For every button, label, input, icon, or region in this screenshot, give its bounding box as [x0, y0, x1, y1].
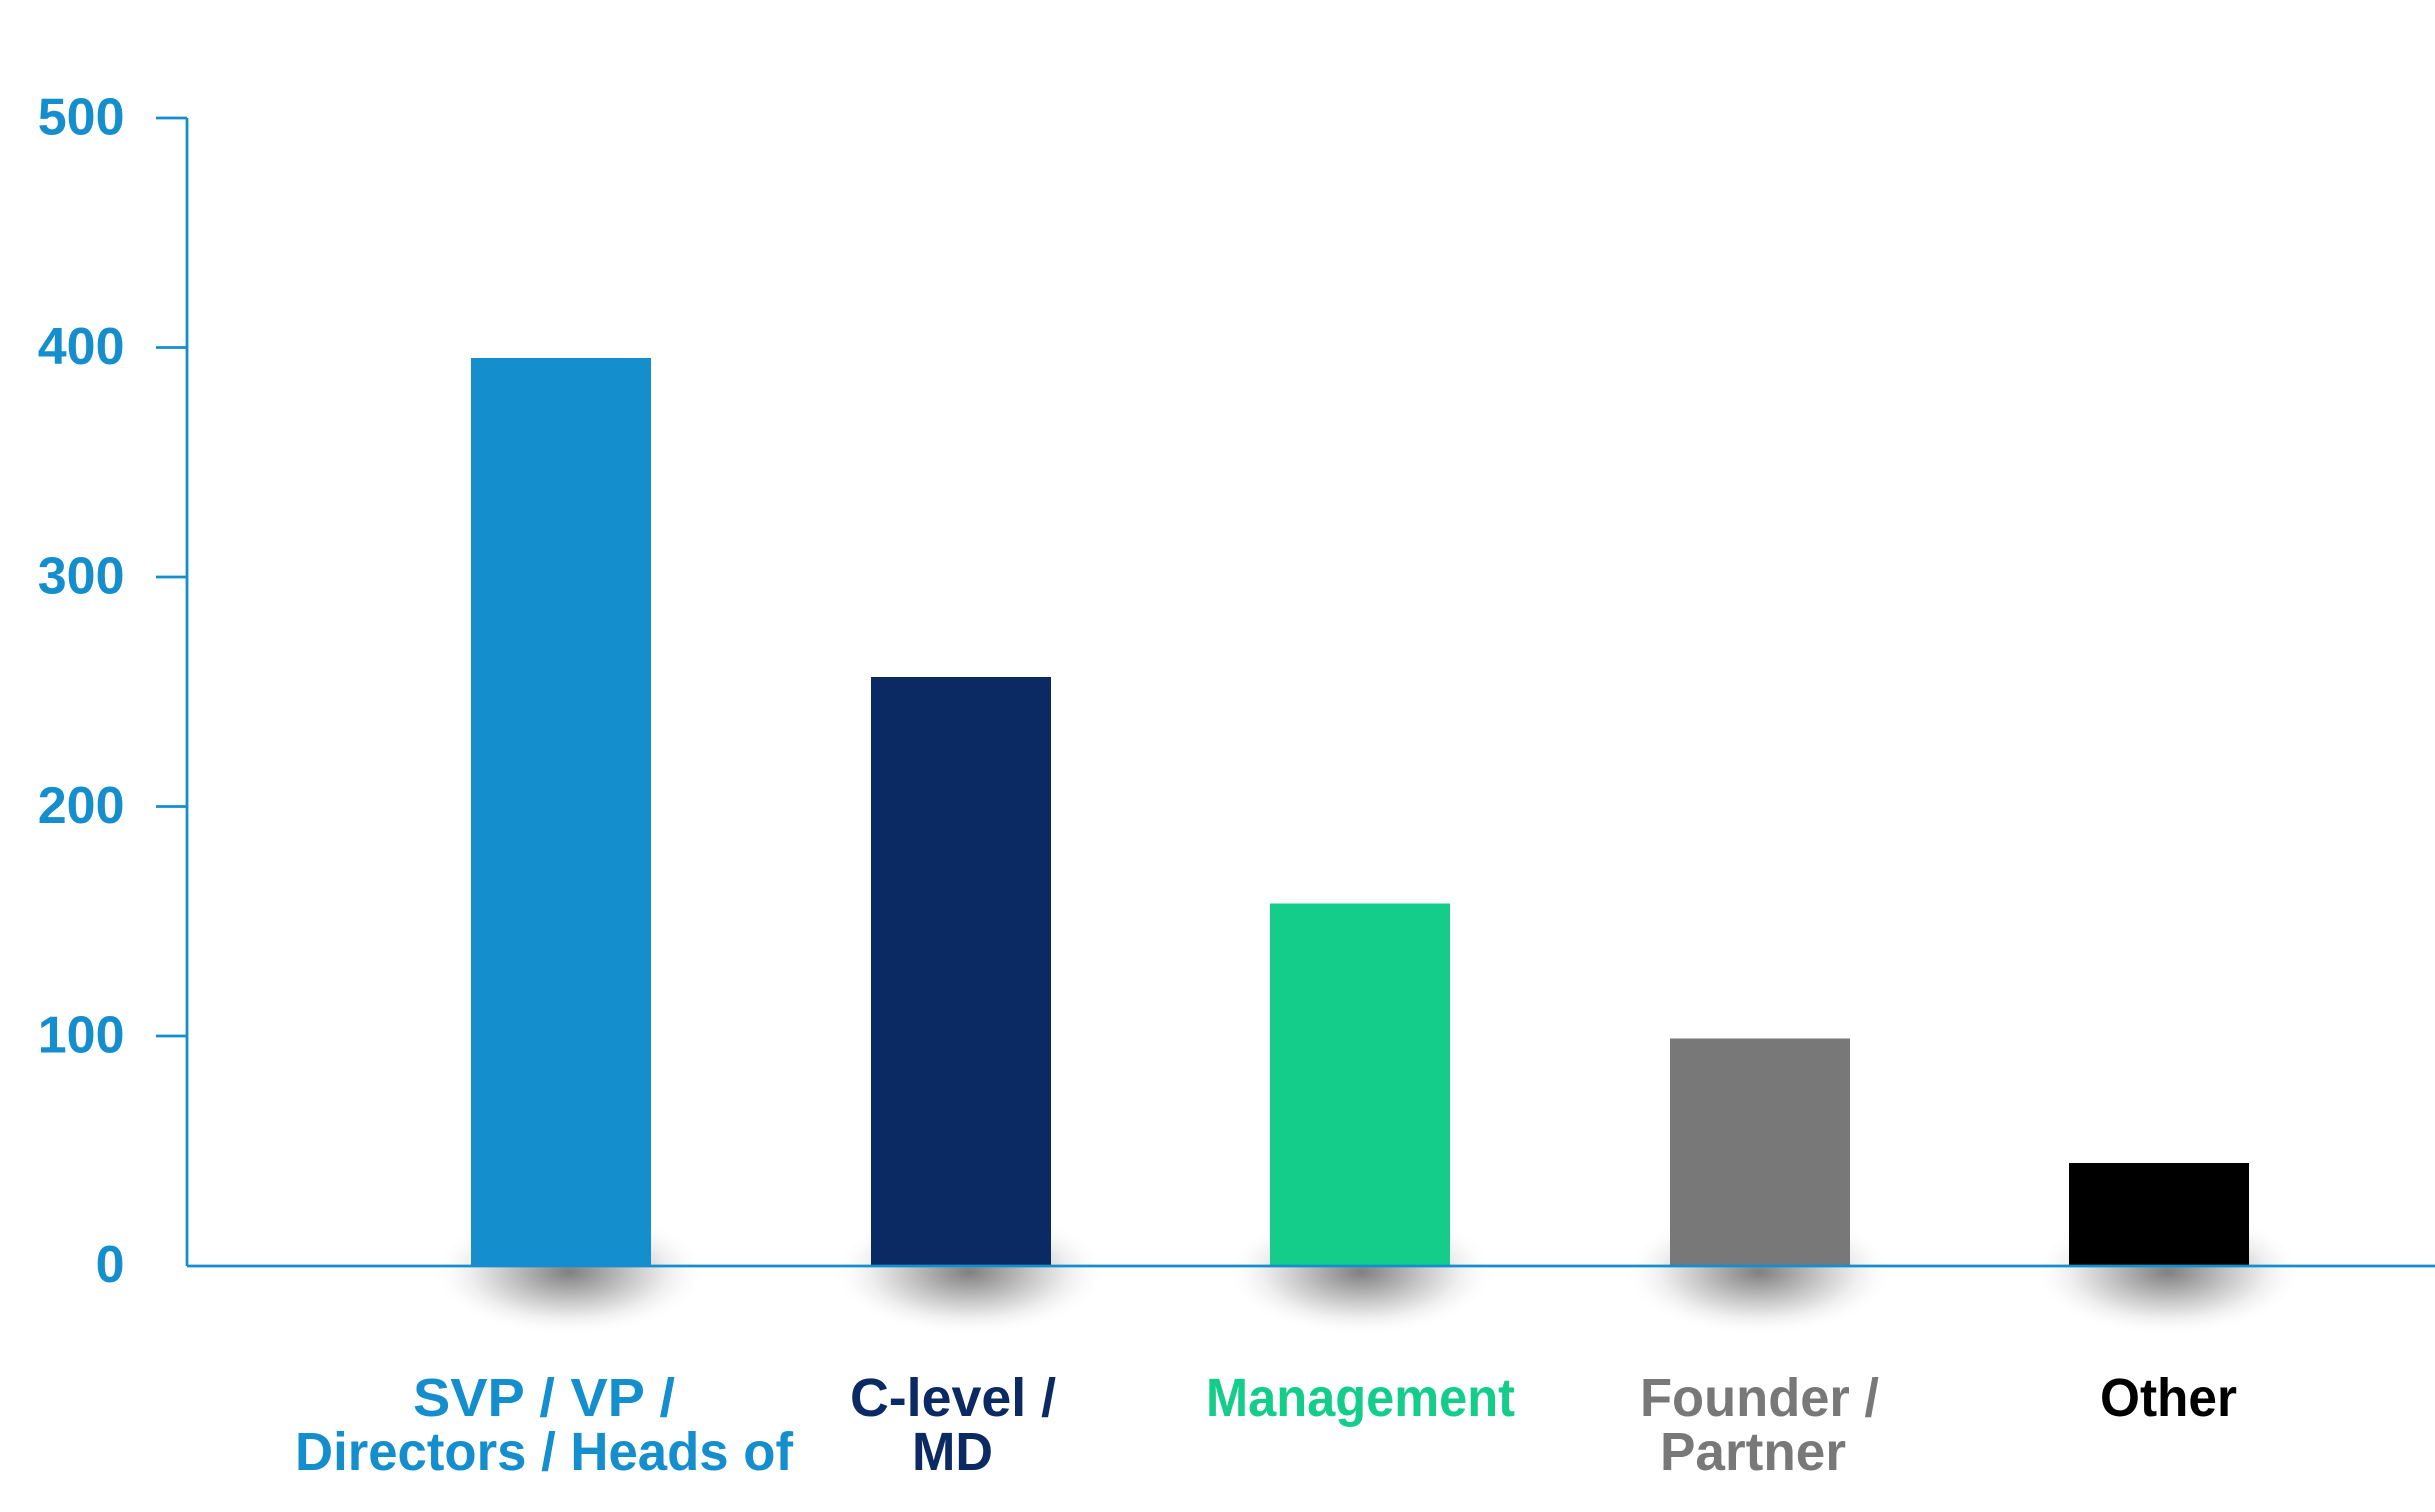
label: Founder / Partner: Partner [1660, 1422, 1846, 1482]
label: SVP / VP / Directors / Heads of [295, 1368, 794, 1482]
bar: Other [2069, 1163, 2249, 1267]
y axis labels: 100 [38, 1006, 124, 1064]
y axis labels [38, 88, 124, 1294]
label: C-level / MD: MD [912, 1422, 993, 1482]
label: SVP / VP / Directors / Heads of: SVP / VP / [413, 1368, 675, 1428]
y axis with ticks [156, 118, 187, 1266]
y axis labels: 200 [38, 777, 124, 835]
label: Other: Other [2100, 1368, 2237, 1428]
label: C-level / MD [850, 1368, 1056, 1482]
label: Founder / Partner: Founder / [1640, 1368, 1879, 1428]
bar: Management [1270, 904, 1450, 1267]
bar shadows [435, 1210, 2300, 1334]
y axis labels: 500 [38, 88, 124, 146]
y axis labels: 400 [38, 318, 124, 376]
y axis labels: 300 [38, 548, 124, 606]
label: SVP / VP / Directors / Heads of: Directors / Heads of [295, 1422, 794, 1482]
y axis labels: 0 [96, 1236, 124, 1294]
label: Management: Management [1206, 1368, 1515, 1428]
x axis line [187, 1265, 2435, 1267]
bar: Founder / Partner [1670, 1038, 1850, 1267]
bar: C-level / MD [871, 677, 1051, 1267]
label: Founder / Partner [1640, 1368, 1879, 1482]
label: C-level / MD: C-level / [850, 1368, 1056, 1428]
bar: SVP / VP / Directors / Heads of [471, 358, 651, 1267]
